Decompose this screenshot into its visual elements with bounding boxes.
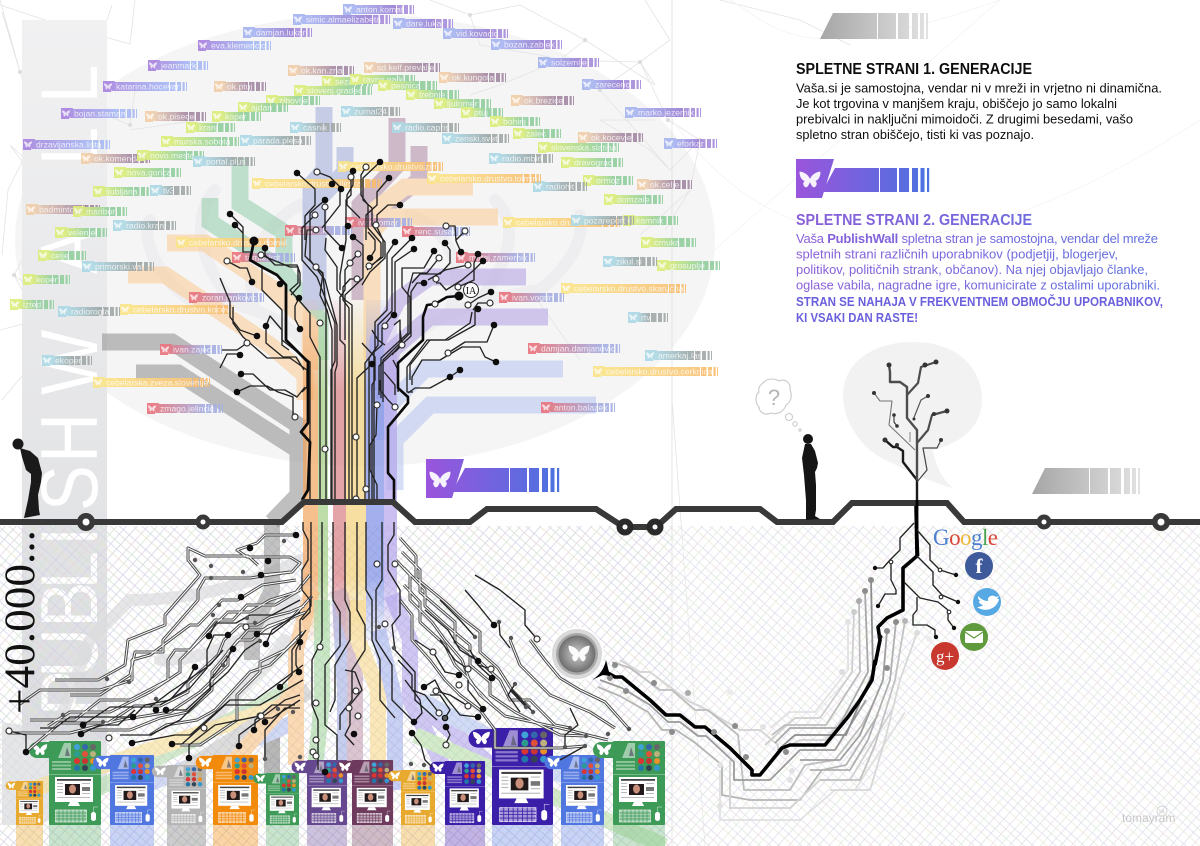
rainbow trunk bbox=[303, 300, 397, 640]
small tree nodes bbox=[872, 360, 950, 447]
name tags: lime: kranj bbox=[199, 122, 218, 132]
name tags: lime: maribor bbox=[86, 206, 115, 216]
purple mark text panel bbox=[796, 159, 929, 198]
name tags: cyan: zikul.si bbox=[616, 256, 642, 266]
Google logo: Google bbox=[933, 525, 998, 550]
tree root nodes bbox=[873, 566, 960, 640]
name tags: cyan: casnik bbox=[303, 122, 328, 132]
name tags: lime: slovenska.slatina bbox=[551, 142, 617, 152]
name tags: lime: celje bbox=[51, 250, 69, 260]
name tags: red: anton.balazek bbox=[554, 402, 608, 412]
signature: tomayram bbox=[1122, 811, 1175, 825]
name tags: lime: ljubljana bbox=[106, 186, 138, 196]
name tags: red: matej.zamernik bbox=[469, 252, 528, 262]
name tags: lime: ljutomer bbox=[447, 98, 478, 108]
name tag overlay: pozareport bbox=[571, 215, 634, 226]
name tags: red: renc.susak bbox=[415, 226, 457, 236]
name tags: yellow: cebelarsko.drustvo bbox=[516, 218, 588, 228]
name tags: lime: sezana bbox=[335, 76, 363, 86]
signature badge: IA bbox=[1159, 810, 1165, 816]
left grey band bbox=[22, 20, 107, 740]
upper tree nodes bbox=[227, 159, 499, 395]
name tags: lime: ajdan bbox=[251, 102, 272, 112]
device: green small bbox=[253, 773, 299, 825]
name tags: cyan: parada.plesa bbox=[253, 136, 303, 146]
name tags: blue-violet: katarina.hocevar bbox=[116, 82, 180, 92]
thought cloud: ? bbox=[768, 385, 780, 410]
device: indigo bbox=[430, 761, 485, 825]
bent person silhouette bbox=[12, 438, 42, 518]
icon: google plus: g+ bbox=[936, 647, 954, 666]
name tags: cyan: rtv bbox=[641, 312, 651, 322]
name tags: cyan: zenski.svet bbox=[455, 134, 498, 144]
icon: facebook bbox=[965, 552, 993, 580]
name tags: cyan: radio.kranj bbox=[126, 220, 166, 230]
name tags: yellow: cebelarsko.drustvo.kocevje bbox=[133, 304, 237, 314]
name tags: yellow: cebelarsko.drustvo.ziri bbox=[351, 162, 437, 172]
callout: STRAN SE NAHAJA V FREKVENTNEM OBMOČJU UPORABNIKOV, bbox=[796, 294, 1163, 309]
paragraph 1: Je kot trgovina v manjšem kraju, obiščejo jo samo lokalni bbox=[796, 96, 1117, 111]
grey mark top bbox=[820, 13, 928, 39]
device: green right bbox=[593, 741, 665, 825]
name tags: lime: koper bbox=[225, 112, 247, 122]
name tags: lime: murska.sobota bbox=[174, 136, 231, 146]
name tags: lime: dravograd bbox=[574, 158, 613, 168]
hub circle with butterfly bbox=[550, 627, 610, 681]
name tags: yellow: cebelarsko.drustvo.domel bbox=[189, 238, 287, 248]
root nodes bbox=[23, 532, 497, 775]
upper tree circuit bbox=[220, 162, 496, 502]
callout bbox=[796, 294, 1163, 325]
name tags: blue-violet: simic.almaelizabeta bbox=[306, 14, 381, 24]
canopy shadow silhouette bbox=[147, 190, 581, 380]
name tags: blue-violet: bojan.staman bbox=[74, 108, 126, 118]
name tags: red: tamar.kot bbox=[245, 252, 281, 262]
name tags: lime: bohinj bbox=[503, 116, 526, 126]
name tags: lime: zibovlje bbox=[279, 96, 308, 106]
device drop strips bbox=[16, 825, 665, 846]
name tags: blue-violet: damjan.lukar bbox=[256, 28, 305, 38]
paragraph 2: politikov, političnih strank, občanov). Na njej objavljajo članke, bbox=[796, 262, 1148, 277]
name tags: cyan: tv3 bbox=[163, 186, 175, 196]
device: grey bbox=[152, 765, 206, 825]
root single traces bbox=[9, 522, 585, 770]
device: blue right bbox=[544, 755, 604, 825]
arrow-like circuit: connection to tree right bbox=[598, 505, 917, 820]
name tags: lime: pesnica bbox=[391, 80, 421, 90]
network nodes bbox=[12, 13, 702, 322]
name tags: yellow: cebelarsko.drustvo.cerknica bbox=[606, 366, 713, 376]
device: indigo large bbox=[469, 728, 553, 825]
name tags: tan: sd.kelf.prevalje bbox=[377, 62, 435, 72]
name tags: blue-violet: zareceno bbox=[595, 80, 631, 90]
tree roots bbox=[875, 523, 958, 637]
signature badge bbox=[1157, 806, 1167, 816]
paragraph 2: Vaša PublishWall spletna stran je samostojna, vendar del mreže bbox=[796, 231, 1158, 246]
name tags: lime: nova.gorica bbox=[127, 168, 172, 178]
name tags: lime: velenje bbox=[68, 228, 95, 238]
name tags: tan: ok.brezice bbox=[524, 96, 563, 106]
text block: generation 1 bbox=[796, 61, 1162, 142]
paragraph 2 bbox=[796, 231, 1160, 292]
name tags: cyan: radio.mbirl bbox=[502, 154, 542, 164]
ground line bbox=[0, 502, 1200, 527]
device: orange bbox=[196, 755, 258, 825]
band vertical text: PUBLISHWALL bbox=[24, 65, 114, 716]
device: blue bbox=[93, 755, 154, 825]
IA badge: IA bbox=[466, 286, 477, 297]
name tag overlay: pozareport: pozareport bbox=[584, 216, 626, 226]
lower-left grey wash bbox=[2, 722, 107, 825]
name tags: cyan: radio.capris bbox=[405, 122, 449, 132]
name tags: blue-violet: marko.jezernik bbox=[638, 108, 695, 118]
name tags: red: ivan.tomar bbox=[358, 218, 398, 228]
name tags: cyan: zurnal24 bbox=[354, 106, 387, 116]
root double traces bbox=[9, 535, 629, 752]
ground junction nodes bbox=[77, 513, 1170, 536]
name tags: lime: kamnik bbox=[636, 216, 664, 226]
grey mark right bbox=[1032, 468, 1140, 494]
paragraph 1: prebivalci in naključni mimoidoči. Z drugimi besedami, vašo bbox=[796, 112, 1133, 126]
name tags: red: ivan.vogrin bbox=[512, 292, 554, 302]
callout: KI VSAKI DAN RASTE! bbox=[796, 310, 918, 325]
name tags: yellow: cebelarsko.drustvo.skaručna bbox=[574, 284, 684, 294]
root inner lines bbox=[9, 535, 629, 752]
name tags: lime: domzale bbox=[617, 194, 650, 204]
name tags: blue-violet: dare.lukar bbox=[406, 18, 444, 28]
name tags: cyan: portal.plus bbox=[206, 156, 246, 166]
name tags: cyan: primorski.val bbox=[95, 262, 143, 272]
name tags: lime: grosuplje bbox=[670, 260, 705, 270]
name tags: lime: ravne.na.k bbox=[363, 74, 404, 84]
name tags: blue-violet: vid.kovacic bbox=[456, 28, 499, 38]
name tags: tan: ok.komenda bbox=[94, 154, 141, 164]
icon: facebook: f bbox=[976, 554, 984, 578]
paragraph 1: spletno stran obiščejo, tisti ki vas poznajo. bbox=[796, 127, 1034, 142]
name tags: tan: ok.kungota bbox=[452, 72, 494, 82]
name tags: blue-violet bbox=[23, 4, 717, 150]
thought cloud bbox=[756, 379, 801, 431]
name tags: cyan: radiorogla bbox=[71, 306, 109, 316]
upper tree open nodes bbox=[224, 164, 493, 502]
ground hatch area bbox=[0, 526, 1200, 846]
devices row bbox=[6, 728, 665, 825]
paragraph 2: oglase vabila, nagradne igre, komunicirate z ostalimi uporabniki. bbox=[796, 278, 1160, 292]
tree root open nodes bbox=[889, 560, 951, 614]
icon: mail bbox=[960, 623, 988, 651]
name tags: yellow: cebelarsko.drustvo.ilirska bbox=[265, 178, 362, 188]
name tags: blue-violet: eva.klemencic bbox=[211, 40, 266, 50]
name tags: red: damjan.damjanovic bbox=[541, 344, 616, 354]
name tags: cyan: amerkaj.las bbox=[658, 350, 702, 360]
name tags: red bbox=[147, 217, 620, 414]
name tags: lime: zalec bbox=[526, 128, 547, 138]
colored bands: upper tree bbox=[102, 107, 596, 522]
name tags: cyan: ekoper bbox=[55, 356, 81, 366]
name tags: blue-violet: anton.komat bbox=[356, 4, 404, 14]
name tags: lime: koper bbox=[36, 274, 58, 284]
name tags: tan: ok.celje bbox=[650, 180, 679, 190]
decorative root shadow bbox=[60, 560, 300, 740]
heading 2: SPLETNE STRANI 2. GENERACIJE bbox=[796, 212, 1032, 229]
paragraph 1: Vaša.si je samostojna, vendar ni v mreži in vrjetno ni dinamična. bbox=[796, 80, 1162, 96]
icon: twitter bbox=[973, 588, 1001, 616]
root open nodes bbox=[6, 561, 540, 759]
device: purple bbox=[292, 760, 347, 825]
name tags: lime: trebnje bbox=[419, 90, 445, 100]
name tags: tan: ok.kan.zna bbox=[301, 66, 343, 76]
name tags: red: zoran.jankovic bbox=[202, 292, 258, 302]
icon: google plus bbox=[931, 642, 959, 670]
heading 1: SPLETNE STRANI 1. GENERACIJE bbox=[796, 61, 1032, 78]
name tags: lime: crnuka bbox=[654, 238, 680, 248]
name tags: tan bbox=[26, 62, 692, 215]
speech bubble bbox=[843, 342, 982, 488]
name tags: yellow: cebelarsko.drustvo.tolmin bbox=[440, 174, 538, 184]
upper tree thick traces bbox=[250, 241, 459, 502]
name tags: yellow bbox=[93, 161, 718, 388]
name tags: blue-violet: eforkar bbox=[677, 138, 704, 148]
name tags: lime: izted bbox=[23, 300, 41, 310]
name tags: lime: novo.mesto bbox=[150, 150, 195, 160]
name tags: tan: ok.kocevje bbox=[591, 132, 632, 142]
canopy background blob bbox=[15, 14, 715, 466]
paragraph 2: spletnih strani različnih uporabnikov (podjetjij, blogerjev, bbox=[796, 246, 1118, 262]
name tags: lime bbox=[10, 74, 720, 310]
purple mark middle bbox=[426, 459, 559, 498]
colored bands: roots and fan bbox=[30, 525, 665, 846]
device: yellow small bbox=[6, 781, 43, 825]
device: green large bbox=[29, 741, 101, 825]
grey connection nodes bbox=[607, 577, 932, 809]
text block: generation 2 bbox=[796, 212, 1163, 325]
name tags: lime: ptuj bbox=[474, 108, 488, 118]
root small grey nodes bbox=[61, 539, 631, 767]
name tags: tan: badminton bbox=[39, 204, 79, 214]
name tags: red: zmago.jelincic bbox=[160, 404, 215, 414]
vertical guide bbox=[671, 0, 673, 846]
thinking man silhouette bbox=[802, 434, 820, 520]
name tags: tan: ok.pisece bbox=[158, 112, 195, 122]
paragraph 1 bbox=[796, 80, 1162, 142]
small tree trunk and branches bbox=[874, 362, 947, 556]
name tags: red: brane.k bbox=[298, 226, 327, 236]
name tags: blue-violet: jeanmark bbox=[160, 60, 197, 70]
name tags: lime: slovenj.gradec bbox=[307, 86, 363, 96]
name tags: blue-violet: bozan.zabjek bbox=[504, 40, 555, 50]
name tags: yellow: cebelarska.zveza.slovenije bbox=[106, 378, 208, 388]
name tags: tan: ok.ptuj bbox=[227, 82, 252, 92]
IA badge bbox=[464, 282, 478, 298]
name tags: lime: ormoz bbox=[596, 176, 620, 186]
name tags: cyan bbox=[42, 106, 712, 366]
name tags: cyan: radiohit bbox=[546, 182, 575, 192]
name tags: blue-violet: solzemlje bbox=[551, 58, 587, 68]
device: yellow bbox=[388, 770, 435, 825]
name tags: blue-violet: drzavljanska.lista bbox=[36, 140, 102, 150]
name tags: red: ivan.zajec bbox=[173, 344, 212, 354]
device: maroon bbox=[336, 760, 393, 825]
